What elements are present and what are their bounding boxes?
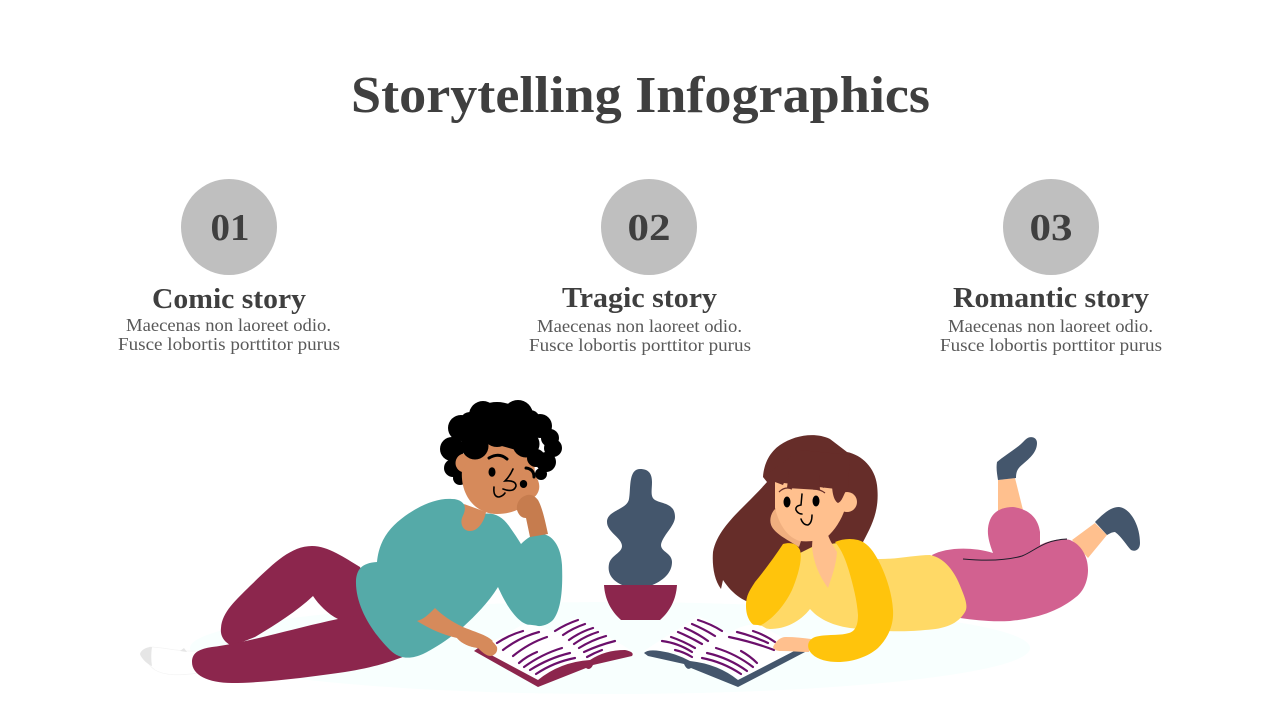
teal sweater <box>356 499 562 658</box>
white shoe <box>140 647 205 675</box>
ground shadow <box>190 602 1030 694</box>
step 3: romantic story <box>940 179 1162 355</box>
heading: comic story: Comic story <box>152 284 306 315</box>
number badge 02: 02 <box>628 207 670 249</box>
plant pot <box>604 585 677 620</box>
front leg <box>192 615 408 683</box>
book cover <box>474 648 633 687</box>
plant <box>604 469 677 620</box>
book: maroon <box>474 618 633 687</box>
title: Storytelling Infographics <box>351 67 930 124</box>
description 2: Maecenas non laoreet odio. <box>537 316 742 336</box>
hair fringe <box>462 417 545 467</box>
light yellow shirt <box>755 543 966 631</box>
face <box>775 482 846 541</box>
raised sock <box>997 437 1037 480</box>
book: navy <box>644 617 805 687</box>
hand on book <box>773 637 811 652</box>
hair back <box>440 400 562 485</box>
right sleeve <box>808 539 893 662</box>
description 3: Maecenas non laoreet odio. <box>948 316 1153 336</box>
step 1: comic story <box>118 179 340 354</box>
forearm <box>417 608 497 656</box>
facial features <box>488 455 534 497</box>
book pages <box>477 618 630 679</box>
description 1: Maecenas non laoreet odio. <box>126 315 331 335</box>
raised foot leg <box>998 478 1023 512</box>
step 2: tragic story <box>529 179 751 355</box>
book text lines <box>497 620 615 674</box>
ear <box>837 492 857 512</box>
man reading <box>140 400 633 687</box>
number badge 03: 03 <box>1030 207 1072 249</box>
second sock <box>1095 507 1140 551</box>
facial features <box>779 488 825 525</box>
number badge 03 <box>1003 179 1099 275</box>
trouser crease line <box>963 539 1067 560</box>
description 1: Fusce lobortis porttitor purus <box>118 334 340 354</box>
number badge 01 <box>181 179 277 275</box>
book text lines <box>662 620 775 674</box>
left sleeve <box>746 543 801 627</box>
long hair <box>713 435 878 605</box>
plant leaves <box>607 469 675 586</box>
face <box>456 440 539 514</box>
back leg <box>221 546 385 646</box>
woman reading <box>644 435 1140 687</box>
neck <box>461 504 486 531</box>
hand on book <box>457 629 497 656</box>
neckline <box>812 530 837 588</box>
fringe <box>763 450 850 503</box>
head <box>763 450 857 547</box>
second leg <box>1072 523 1107 558</box>
number badge 01: 01 <box>210 207 250 249</box>
number badge 02 <box>601 179 697 275</box>
book cover <box>644 648 805 687</box>
heading: tragic story: Tragic story <box>562 283 717 314</box>
description 3: Fusce lobortis porttitor purus <box>940 335 1162 355</box>
heading: romantic story: Romantic story <box>953 283 1149 314</box>
illustration: readers <box>140 400 1140 694</box>
supporting hand <box>517 495 548 537</box>
description 2: Fusce lobortis porttitor purus <box>529 335 751 355</box>
book pages <box>644 617 803 679</box>
resting hand <box>770 509 801 547</box>
pink trousers <box>932 507 1088 621</box>
